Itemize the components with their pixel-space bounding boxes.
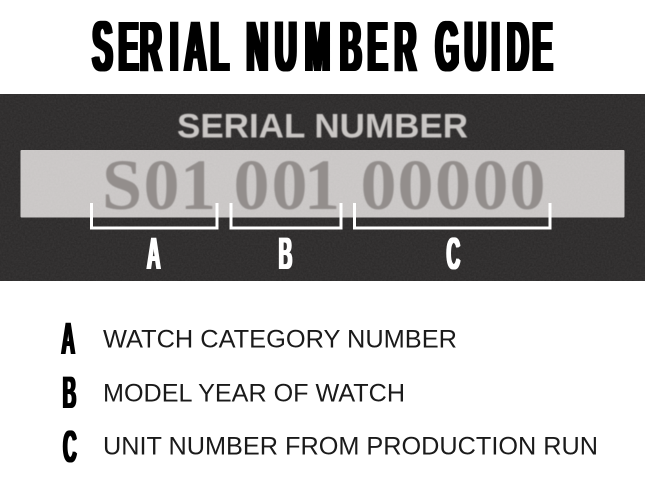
legend text C: UNIT NUMBER FROM PRODUCTION RUN [103,432,598,460]
photo heading: serial number: SERIAL NUMBER [177,108,468,146]
panel: serial number photo [0,94,645,281]
bracket A [92,203,217,228]
legend row C [63,423,598,472]
title: SERIAL NUMBER GUIDE [92,6,553,87]
label A: A [147,230,161,279]
legend row A [61,315,457,364]
legend text A: WATCH CATEGORY NUMBER [103,326,457,354]
legend row B [63,369,405,418]
serial digits: S0100100000 [102,145,546,225]
label C: C [446,230,460,279]
legend letter A: A [61,315,75,364]
legend text B: MODEL YEAR OF WATCH [103,380,405,408]
serial plate [20,150,624,218]
label B: B [279,230,292,279]
legend letter B: B [63,369,76,418]
bracket C [354,203,550,228]
bracket B [231,203,341,228]
legend letter C: C [63,423,77,472]
